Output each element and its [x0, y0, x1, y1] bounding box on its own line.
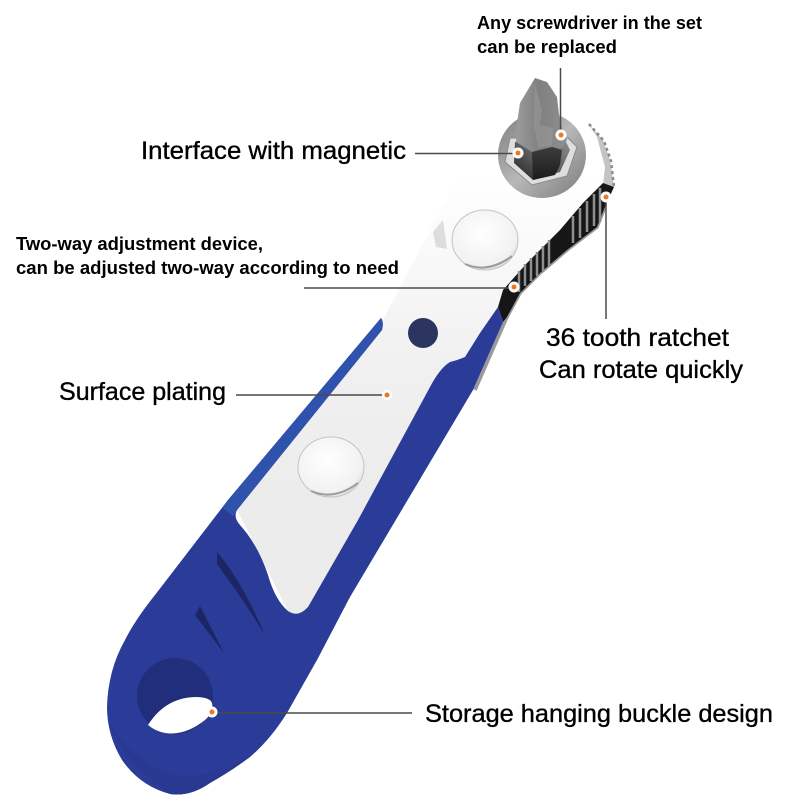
text: screwdriver replaceable: Any screwdriver in the set — [477, 13, 702, 33]
text: storage hanging buckle design: Storage hanging buckle design — [425, 700, 773, 728]
metal head plate — [237, 115, 607, 614]
wrench illustration — [107, 78, 614, 795]
text: two-way adjustment: can be adjusted two-way according to need — [16, 258, 399, 278]
callout marker: hanging buckle — [206, 706, 218, 718]
text: two-way adjustment — [16, 234, 399, 278]
text: 36 tooth ratchet — [539, 324, 743, 384]
bright blue strip — [222, 318, 383, 516]
leader line: ratchet — [605, 197, 607, 319]
text: screwdriver replaceable: can be replaced — [477, 37, 617, 57]
handle hanging hole — [137, 658, 213, 734]
leader line: surface — [236, 394, 384, 396]
text: 36 tooth ratchet: Can rotate quickly — [539, 356, 743, 384]
callout marker: two-way adjustment — [508, 282, 520, 292]
callout marker: screwdriver — [556, 130, 566, 140]
leader line: screwdriver — [560, 68, 562, 132]
text: interface with magnetic: Interface with magnetic — [141, 137, 406, 165]
handle slots — [195, 552, 265, 653]
callout marker: surface — [382, 390, 392, 400]
handle bottom rim shading — [108, 718, 250, 795]
ratchet teeth band — [498, 183, 614, 322]
socket ring — [498, 112, 586, 198]
blue rubber handle — [107, 307, 503, 795]
socket interior — [514, 140, 570, 180]
rivet lower — [298, 437, 364, 497]
leader line: two-way adjustment — [304, 287, 512, 289]
text: surface plating: Surface plating — [59, 378, 226, 406]
callout marker: interface — [512, 148, 524, 158]
screwdriver bit — [516, 78, 567, 152]
leader line: hanging buckle — [214, 712, 412, 714]
leader line: interface — [415, 152, 514, 154]
socket hex — [505, 138, 577, 185]
socket black hex — [532, 147, 562, 180]
bit highlight facet — [534, 84, 553, 148]
callout marker: ratchet — [600, 192, 612, 202]
text: two-way adjustment: Two-way adjustment device, — [16, 234, 263, 254]
ratchet outer teeth — [588, 123, 614, 187]
plate side notch — [433, 220, 447, 249]
dark pivot hole — [408, 318, 438, 348]
outer silver edge — [475, 207, 605, 390]
text: screwdriver replaceable — [477, 13, 702, 57]
text: 36 tooth ratchet: 36 tooth ratchet — [546, 324, 729, 352]
rivet upper — [452, 210, 518, 270]
